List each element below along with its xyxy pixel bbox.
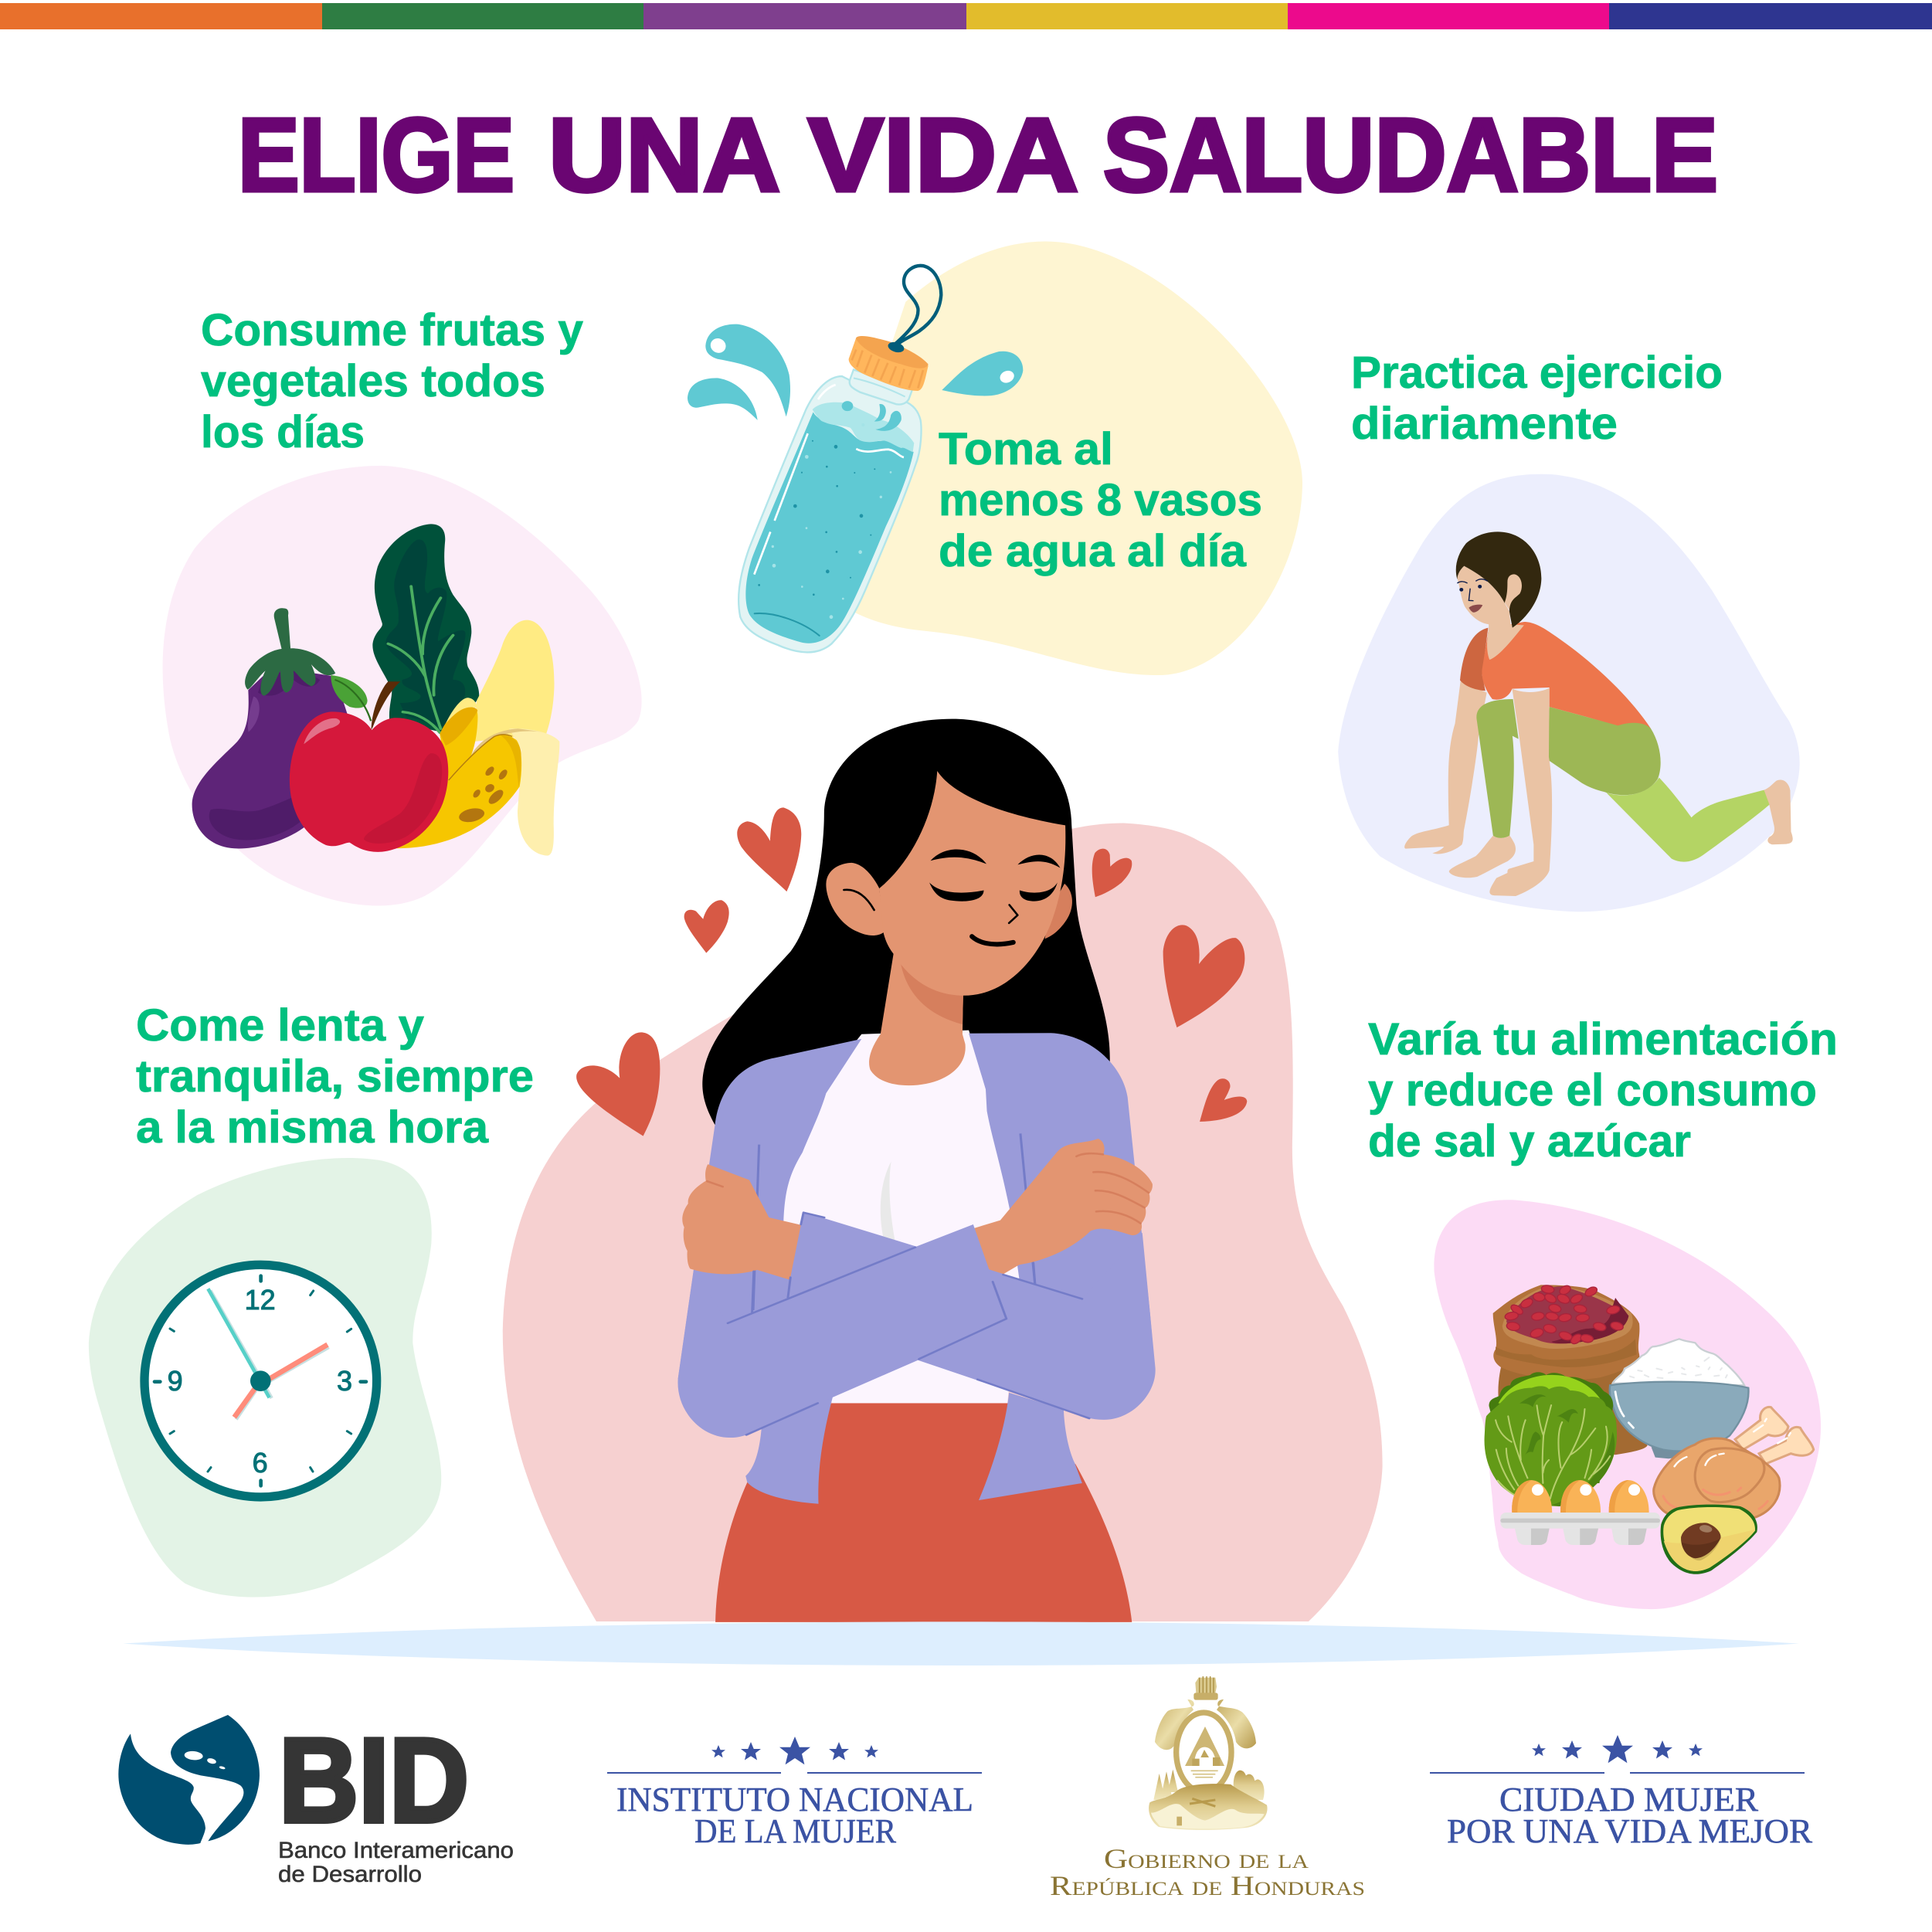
stars and rule <box>607 1737 982 1774</box>
icon: sack of beans <box>1493 1284 1647 1455</box>
icon: clock: 3 <box>337 1365 352 1397</box>
icon: food illustration <box>1485 1284 1814 1574</box>
icon: leafy green <box>372 524 479 734</box>
water background blob <box>813 241 1302 675</box>
hearts <box>576 807 1247 1136</box>
icon: fruits illustration <box>192 524 559 856</box>
icon: apple <box>290 675 448 852</box>
panel: water <box>688 241 1302 675</box>
BID full name: Banco Interamericano <box>278 1838 514 1863</box>
clock background blob <box>89 1158 441 1598</box>
logo: Ciudad Mujer <box>1430 1735 1813 1850</box>
Gobierno text <box>1050 1843 1365 1901</box>
Instituto text <box>616 1781 973 1850</box>
forearm A <box>677 1224 1007 1438</box>
pyramid <box>1185 1727 1224 1766</box>
ears <box>826 863 885 935</box>
panel: eat slowly <box>89 1000 534 1598</box>
Gobierno text: Gobierno de la <box>1104 1843 1309 1874</box>
food background blob <box>1434 1200 1821 1609</box>
icon: splash left <box>688 324 790 420</box>
heading: exercise: diariamente <box>1351 399 1618 449</box>
heading: water: Toma al <box>939 424 1113 474</box>
woman crossed arms and jacket hem <box>677 1212 1156 1504</box>
woman upper body <box>678 719 1155 1403</box>
seal ring <box>1173 1710 1234 1794</box>
BID wordmark: BID <box>279 1713 469 1847</box>
jacket seams lower <box>728 1213 1089 1435</box>
BID full name <box>278 1838 514 1887</box>
Instituto text: INSTITUTO NACIONAL <box>616 1781 973 1818</box>
title <box>238 97 1718 213</box>
title: UNA <box>548 97 780 213</box>
heading: eat slowly <box>136 1000 534 1153</box>
icon: splash right <box>942 351 1023 396</box>
left hand <box>682 1164 814 1282</box>
facial features <box>844 849 1060 944</box>
logo: BID <box>118 1713 514 1887</box>
icon: bowl of rice <box>1610 1339 1748 1458</box>
shirt <box>775 1031 1021 1403</box>
mountain base <box>1149 1784 1268 1830</box>
Instituto text: DE LA MUJER <box>694 1812 897 1850</box>
title: SALUDABLE <box>1103 97 1718 213</box>
heading: eat slowly: tranquila, siempre <box>136 1051 534 1102</box>
Gobierno text: República de Honduras <box>1050 1870 1365 1901</box>
icon: BID map mark <box>118 1715 260 1845</box>
heading: exercise: Practica ejercicio <box>1351 348 1723 398</box>
heading: water <box>939 424 1262 576</box>
title: ELIGE <box>238 97 514 213</box>
heading: varied diet: de sal y azúcar <box>1368 1116 1691 1166</box>
heading: fruits <box>201 305 583 457</box>
stars and rule <box>1430 1735 1805 1774</box>
crown quiver <box>1195 1678 1217 1693</box>
heading: exercise <box>1351 348 1723 449</box>
heading: varied diet <box>1368 1014 1838 1166</box>
jacket hem right <box>979 1393 1082 1500</box>
jacket seams upper <box>753 1133 1035 1310</box>
central pink blob <box>503 823 1383 1621</box>
icon: clock: 9 <box>168 1365 183 1397</box>
icon: chicken <box>1654 1407 1814 1518</box>
title: VIDA <box>808 97 1078 213</box>
face <box>879 771 1065 996</box>
heading: varied diet: y reduce el consumo <box>1368 1065 1817 1115</box>
floor ellipse <box>124 1621 1799 1665</box>
panel: central woman hugging herself <box>503 719 1383 1622</box>
icon: woman exercising <box>1404 531 1793 896</box>
icon: eggs in tray <box>1500 1480 1660 1545</box>
icon: clock: 6 <box>253 1447 268 1479</box>
skirt <box>715 1403 1132 1622</box>
top colour band <box>0 3 1932 29</box>
icon: clock <box>144 1265 377 1497</box>
forearm B <box>788 1212 1156 1420</box>
icon: clock: 12 <box>245 1284 276 1316</box>
Ciudad Mujer text: POR UNA VIDA MEJOR <box>1447 1812 1813 1850</box>
right hand <box>964 1139 1153 1281</box>
icon: water bottle <box>688 266 1023 652</box>
icon: coat of arms <box>1149 1676 1268 1830</box>
exercise background blob <box>1338 474 1800 912</box>
trees <box>1153 1770 1178 1800</box>
heading: varied diet: Varía tu alimentación <box>1368 1014 1838 1064</box>
Ciudad Mujer text <box>1447 1781 1813 1850</box>
icon: lettuce <box>1485 1372 1617 1506</box>
Ciudad Mujer text: CIUDAD MUJER <box>1499 1781 1759 1818</box>
hair <box>702 719 1110 1125</box>
neck <box>869 952 966 1085</box>
icon: banana <box>397 620 559 856</box>
jacket right <box>969 1033 1155 1368</box>
fruit background blob <box>163 466 642 905</box>
heading: eat slowly: a la misma hora <box>136 1102 489 1153</box>
heading: fruits: los días <box>201 407 365 457</box>
panel: exercise <box>1338 348 1800 912</box>
BID full name: de Desarrollo <box>278 1862 422 1887</box>
heading: fruits: vegetales todos <box>201 356 545 406</box>
heading: eat slowly: Come lenta y <box>136 1000 424 1051</box>
heading: water: de agua al día <box>939 526 1247 576</box>
icon: eggplant <box>192 608 350 848</box>
heading: fruits: Consume frutas y <box>201 305 583 355</box>
laurels left and right <box>1155 1699 1194 1750</box>
panel: fruits and vegetables <box>163 305 642 905</box>
jacket hem left <box>745 1397 833 1504</box>
panel: varied diet <box>1368 1014 1838 1609</box>
logo: Gobierno de la República de Honduras <box>1050 1676 1365 1901</box>
heading: water: menos 8 vasos <box>939 475 1262 525</box>
logo: Instituto Nacional de la Mujer <box>607 1737 982 1850</box>
icon: avocado <box>1661 1505 1757 1574</box>
jacket left <box>678 1039 861 1380</box>
